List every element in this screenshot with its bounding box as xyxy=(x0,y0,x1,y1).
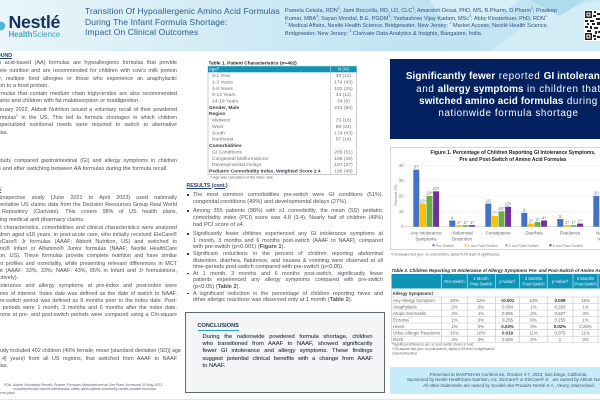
table 2: allergy symptoms xyxy=(392,268,600,356)
table 2: allergy symptoms: Anaphylaxis xyxy=(393,304,417,309)
table 2: allergy symptoms: 1% xyxy=(530,304,537,309)
title: Impact On Clinical Outcomes xyxy=(85,27,198,37)
conclusions text: fewer GI intolerance and allergy symptoms. These findings xyxy=(202,348,372,354)
table 1: patient characteristics: Congenital Malformations xyxy=(212,156,269,162)
table 1: patient characteristics: GI Conditions xyxy=(212,149,242,155)
table 2: allergy symptoms: 6 Months xyxy=(577,276,594,281)
table 1: patient characteristics: Developmental Delays xyxy=(212,162,262,168)
bar values: 20 xyxy=(594,191,599,196)
conclusions text: to NAAF. xyxy=(202,363,225,369)
bar values: 10* xyxy=(498,206,505,211)
table 2: allergy symptoms: Other Allergic Reactions xyxy=(393,331,441,336)
sponsor note band xyxy=(390,366,600,394)
table 1: patient characteristics: 1-3 Years xyxy=(212,79,233,85)
table 2: allergy symptoms: 0% xyxy=(478,317,484,322)
table 2: allergy symptoms: Allergy Symptoms‡ xyxy=(392,291,434,296)
conclusions text: who transitioned from AAAF to NAAF, showed significantly xyxy=(202,341,372,347)
table 1: patient characteristics: 102 (25) xyxy=(334,86,353,92)
panel: results continued xyxy=(186,182,383,302)
table 2: allergy symptoms: 2% xyxy=(451,337,458,342)
logo: Nestle Health Science: Nestlé xyxy=(8,12,60,32)
legend xyxy=(432,243,583,248)
legend: 1 mo Post-Switch xyxy=(468,243,498,248)
bullets: other allergic reactions was observed only at 1 month (Table 2). xyxy=(193,296,352,302)
table 1: patient characteristics: 243 (60) xyxy=(334,105,353,111)
legend: Pre-Switch xyxy=(436,243,454,248)
bar values: 15* xyxy=(420,198,427,203)
figure 1 title: Pre and Post-Switch of Amino Acid Formulas xyxy=(459,157,567,163)
bullets: congenital conditions (49%) and developmental delays (27%). xyxy=(193,198,348,204)
table 2: allergy symptoms: 0.255 xyxy=(502,317,514,322)
table 2: allergy symptoms: 0.086 xyxy=(502,311,514,316)
table 1: patient characteristics: N (%) xyxy=(338,67,349,72)
table 2: allergy symptoms: Atopic Dermatitis xyxy=(393,311,427,316)
sponsor note band: All other trademarks are owned by Société des Produits Nestlé S.A., Vevey, Switzerland xyxy=(423,383,594,388)
authors and affiliations: 1 Medical Affairs, Nestlé Health Science, Bridgewater, New Jersey; 2 Market Access, Nestlé Health Science, xyxy=(285,21,548,29)
table 2: allergy symptoms: 0.056 xyxy=(502,337,514,342)
table 2: allergy symptoms: †Chi-square test (pre- vs post-switch), alpha=0.05 level of significance. xyxy=(392,347,496,351)
table 2: allergy symptoms: p-Value† xyxy=(552,279,569,284)
table 1: patient characteristics: Comorbidities xyxy=(209,143,242,149)
panel: conclusions xyxy=(184,312,384,392)
bar values: 9 xyxy=(523,208,526,213)
heading: conclusions: CONCLUSIONS xyxy=(198,323,239,329)
category labels: Distention xyxy=(452,237,472,242)
conclusions text: During the nationwide powdered formula shortage, children xyxy=(202,334,372,340)
bars: pre-switch xyxy=(413,170,599,227)
table 2: allergy symptoms: 0% xyxy=(530,317,537,322)
table 2: allergy symptoms: Rash xyxy=(393,337,404,342)
key message banner: and allergy symptoms in children that xyxy=(416,84,600,94)
bullets: Significant reductions in the percent of children reporting abdominal xyxy=(193,250,383,256)
table 2: allergy symptoms: 11% xyxy=(529,331,538,336)
bar values: 23* xyxy=(433,186,440,191)
table 2: allergy symptoms: 15% xyxy=(581,298,590,303)
y axis: 0 xyxy=(401,224,404,229)
table 1: patient characteristics: 43 (11) xyxy=(336,92,351,98)
table 2: allergy symptoms: <0.001 xyxy=(501,298,515,303)
category labels: Diarrhea xyxy=(525,230,543,235)
key message banner: nationwide formula shortage xyxy=(438,108,579,119)
table 2: allergy symptoms: 0% xyxy=(530,324,537,329)
table 1: patient characteristics: South xyxy=(212,130,225,136)
bar values: 1* xyxy=(463,220,468,225)
category labels: Flatulence xyxy=(560,230,581,235)
key message banner: switched amino acid formulas during xyxy=(419,96,598,107)
bar values: 3* xyxy=(535,217,540,222)
conclusions text xyxy=(202,334,372,369)
heading: results continued: RESULTS (cont.) xyxy=(186,182,228,188)
table 2: allergy symptoms: Eczema xyxy=(393,317,409,322)
table 1: patient characteristics: 196 (49) xyxy=(334,168,353,174)
category labels: Abdominal xyxy=(451,230,473,235)
y axis: Percent (%) xyxy=(393,184,398,206)
table 1: patient characteristics: Midwest xyxy=(212,118,231,124)
table 2: allergy symptoms: p-Value† xyxy=(499,279,516,284)
table 2: allergy symptoms: 0.02% xyxy=(554,324,566,329)
table 2: allergy symptoms: 0% xyxy=(478,324,484,329)
authors and affiliations xyxy=(285,6,557,37)
QR code xyxy=(584,10,600,41)
table 2: allergy symptoms: Pre-Switch xyxy=(444,279,465,284)
key message banner xyxy=(390,59,600,139)
table 2: allergy symptoms: 1% xyxy=(478,311,484,316)
bullets: (p<0.05) (Table 2). xyxy=(193,284,240,290)
table 2: allergy symptoms: 1 Month xyxy=(473,276,489,281)
bullets: comorbidity index (PCI) score was 4.8 (3.4). Nearly half of children (49%) xyxy=(193,214,383,220)
bullets: Among 355 patients (88%) with ≥1 comorbidity, the mean (SD) pediatric xyxy=(193,208,383,214)
logo: Nestle Health Science: HealthScience xyxy=(8,30,60,39)
table 2: allergy symptoms: 2% xyxy=(530,311,537,316)
sponsor note band: Presented at NASPGHAN Conference, October 4-7, 2023, San Diego, California. xyxy=(430,372,587,376)
table 2: allergy symptoms: 20% xyxy=(450,298,459,303)
bars: 6 month post-switch xyxy=(433,191,583,227)
references: FDA. Abbott Voluntarily Recalls Powder Formulas Manufactured at One Plant. Accessed 30 May 2023. xyxy=(4,382,163,386)
y axis xyxy=(393,163,404,229)
bar values: 2* xyxy=(529,218,533,223)
title: During The Infant Formula Shortage: xyxy=(85,16,227,26)
table 2: allergy symptoms: 2% xyxy=(451,304,458,309)
bar values: 4 xyxy=(451,215,454,220)
table 1: patient characteristics: 14-18 Years xyxy=(212,98,239,104)
panel: objective xyxy=(0,158,177,172)
bar values: 13* xyxy=(505,202,512,206)
table 2: allergy symptoms: Post-Switch xyxy=(574,282,597,286)
y axis: 30 xyxy=(399,178,404,183)
table 2: allergy symptoms: 1% xyxy=(451,317,458,322)
bar values: 1* xyxy=(565,220,569,225)
authors and affiliations: Pamela Cekola, RDN1; Jami Boccella, RD, LD, CLC1; Amarsinh Desai, PhD, MS, B.Pharm, D.Pharm2; Pradeep xyxy=(285,6,557,14)
table 2: allergy symptoms: Hives xyxy=(393,324,405,329)
table 2: allergy symptoms: 13% xyxy=(529,298,538,303)
table 1: patient characteristics: Age† xyxy=(209,67,220,72)
bar values: 20* xyxy=(426,191,433,196)
bullets: distention, diarrhea, flatulence, and nausea & vomiting were observed at all xyxy=(193,258,383,264)
bullets: Significantly fewer children experienced any GI intolerance symptoms at xyxy=(193,230,383,236)
table 2: allergy symptoms: 12% xyxy=(477,298,485,303)
title xyxy=(85,6,280,37)
figure 1 title xyxy=(430,150,596,163)
table 1: patient characteristics: 4-8 Years xyxy=(212,86,233,92)
legend: 6 mo Post-Switch xyxy=(552,243,583,248)
table 2: allergy symptoms: 0.25% xyxy=(579,324,592,329)
table 2: allergy symptoms: Post-Switch xyxy=(522,282,545,286)
bar values: 15 xyxy=(486,198,491,203)
bar values: 4* xyxy=(542,215,546,220)
references: ov/safety/recalls-market-withdrawals-safety-alerts/abbott-voluntarily-recalls-powder-formulas- xyxy=(13,387,157,391)
table 2: allergy symptoms: Any Allergy Symptom xyxy=(393,298,435,303)
table 2: allergy symptoms: 1% xyxy=(582,317,589,322)
table 2: allergy symptoms: ‡Gastrointestinal xyxy=(392,352,417,356)
bars: 1 month post-switch xyxy=(420,204,570,227)
title: Transition Of Hypoallergenic Amino Acid Formulas xyxy=(85,6,280,16)
table 1: patient characteristics: 198 (49) xyxy=(334,156,353,162)
bullets: had PCI score of ≥4. xyxy=(193,222,244,228)
panel: background xyxy=(0,53,177,136)
bullets: time-periods post-switch compared with pre-switch (p<0.05). xyxy=(193,264,344,270)
table 1: patient characteristics: 49 (12) xyxy=(336,73,352,79)
table 1: patient characteristics: 174 (43) xyxy=(334,130,353,136)
bar values: 37 xyxy=(414,164,419,170)
bar values: 1* xyxy=(571,220,576,225)
table 2: allergy symptoms: 10% xyxy=(477,331,485,336)
table 1: patient characteristics: 34 (8) xyxy=(337,98,350,104)
table 2: allergy symptoms: 0% xyxy=(478,304,484,309)
table 1: patient characteristics: Pediatric Comorbidity Index, Weighted Score ≥ 4 xyxy=(209,168,321,174)
table 2: allergy symptoms: 0.008 xyxy=(554,298,566,303)
category labels: Any Intolerance xyxy=(410,230,442,235)
bar values: 1* xyxy=(470,220,474,225)
table 2: allergy symptoms: 0.255 xyxy=(554,317,566,322)
y axis: 20 xyxy=(399,194,404,198)
bullets: The most common comorbidities pre-switch were GI conditions (51%), xyxy=(193,192,383,198)
figure 1 footnote: *Chi-square test (pre- vs post-switch), alpha=0.05 level of significance. xyxy=(391,252,500,256)
bullets: patients experienced any allergy symptoms compared with pre-switch xyxy=(193,277,383,283)
table 1: patient characteristics: † Age was calculated at the index date. xyxy=(210,176,274,180)
table 2: allergy symptoms: 0.507 xyxy=(554,311,566,316)
table 1: patient characteristics: 107 (27) xyxy=(334,162,353,168)
header band xyxy=(0,0,600,51)
conclusions text: suggest potential clinical benefits with a change from AAAF xyxy=(202,356,372,362)
table 2: allergy symptoms: 1 xyxy=(559,337,562,342)
authors and affiliations: Bridgewater, New Jersey; 3 Clarivate Data Analytics & Insights, Bangalore, India xyxy=(285,29,481,37)
category labels: Constipation xyxy=(485,230,511,235)
table 1: patient characteristics: 205 (51) xyxy=(334,149,353,155)
references: one-plant xyxy=(0,391,15,395)
table 2: allergy symptoms: 3 Months xyxy=(525,276,542,281)
table 2: allergy symptoms: 0.094 xyxy=(502,304,514,309)
table 2: allergy symptoms: 11% xyxy=(581,331,590,336)
panel: methods xyxy=(0,186,177,318)
table 1: patient characteristics: 73 (18) xyxy=(336,118,352,124)
panel: results (left) xyxy=(0,348,181,368)
bar values: 2* xyxy=(578,218,582,223)
bar values xyxy=(414,164,599,225)
table 2: allergy symptoms: 1% xyxy=(582,304,589,309)
bullets: A significant reduction in the percentage of children reporting hives and xyxy=(193,290,383,296)
table 1: patient characteristics: 57 (14) xyxy=(336,137,352,143)
table 1: patient characteristics: Region xyxy=(209,111,225,117)
table 2: allergy symptoms: *Significant difference pre- vs post-switch shown in bold. xyxy=(392,342,474,346)
table 1: patient characteristics: Gender, Male xyxy=(209,105,239,111)
bullets: with pre-switch (p<0.001) (Figure 1). xyxy=(193,244,285,250)
figure 1 panel border xyxy=(390,147,600,250)
category labels: Symptoms xyxy=(415,237,437,242)
bars: 3 month post-switch xyxy=(426,196,576,227)
table 1: patient characteristics: 174 (43) xyxy=(334,79,353,85)
bullets: 1 month, 3 months and 6 months post-switch (AAAF to NAAF), compared xyxy=(193,238,383,244)
table 2: allergy symptoms: 2% xyxy=(530,337,537,342)
legend: 3 mo Post-Switch xyxy=(508,243,539,248)
table 2: allergy symptoms: 0.075 xyxy=(554,331,566,336)
y axis: 10 xyxy=(399,209,404,214)
bar values: 5 xyxy=(559,214,562,219)
table 1: patient characteristics: Table 1. Patient Characteristics (n=402) xyxy=(208,60,297,66)
table 2: allergy symptoms: 3% xyxy=(582,337,589,342)
table 1: patient characteristics: 0-1 Year xyxy=(212,73,231,79)
table 1: patient characteristics: West xyxy=(212,124,224,130)
table 2: allergy symptoms: 0.203 xyxy=(554,304,566,309)
table 2: allergy symptoms: 15% xyxy=(450,331,459,336)
logo: Nestle Health Science xyxy=(0,12,60,39)
bar values: 7* xyxy=(493,211,497,216)
bullets xyxy=(187,192,383,302)
bar values: 1* xyxy=(457,220,461,225)
references xyxy=(0,382,163,395)
table 1: patient characteristics: Northeast xyxy=(212,137,234,143)
chart: GI intolerance bars xyxy=(393,163,600,248)
table 2: allergy symptoms: 0.019 xyxy=(502,331,514,336)
table 2: allergy symptoms: 3% xyxy=(582,311,589,316)
y axis: 40 xyxy=(399,163,404,168)
authors and affiliations: Kumar, MBA3; Sayan Mondal, B.E, PGDM3; Yashashree Vijay Kadam, MSc3; Abby Klosterbuer, PhD, RDN1 xyxy=(285,14,547,22)
category labels xyxy=(410,230,600,242)
table 2: allergy symptoms: Post-Switch xyxy=(470,282,493,286)
table 2: allergy symptoms: 0% xyxy=(478,337,484,342)
table 1: patient characteristics: 98 (24) xyxy=(336,124,352,130)
table 2: allergy symptoms: 1% xyxy=(451,324,458,329)
bullets: At 1 month, 3 months and 6 months post-switch, significantly fewer xyxy=(193,270,383,276)
table 2: allergy symptoms: 0.03% xyxy=(501,324,514,329)
figure 1 title: Figure 1. Percentage of Children Reporting GI Intolerance Symptoms, xyxy=(430,150,596,156)
table 1: patient characteristics: 9-13 Years xyxy=(212,92,236,98)
table 2: allergy symptoms: 3% xyxy=(451,311,458,316)
